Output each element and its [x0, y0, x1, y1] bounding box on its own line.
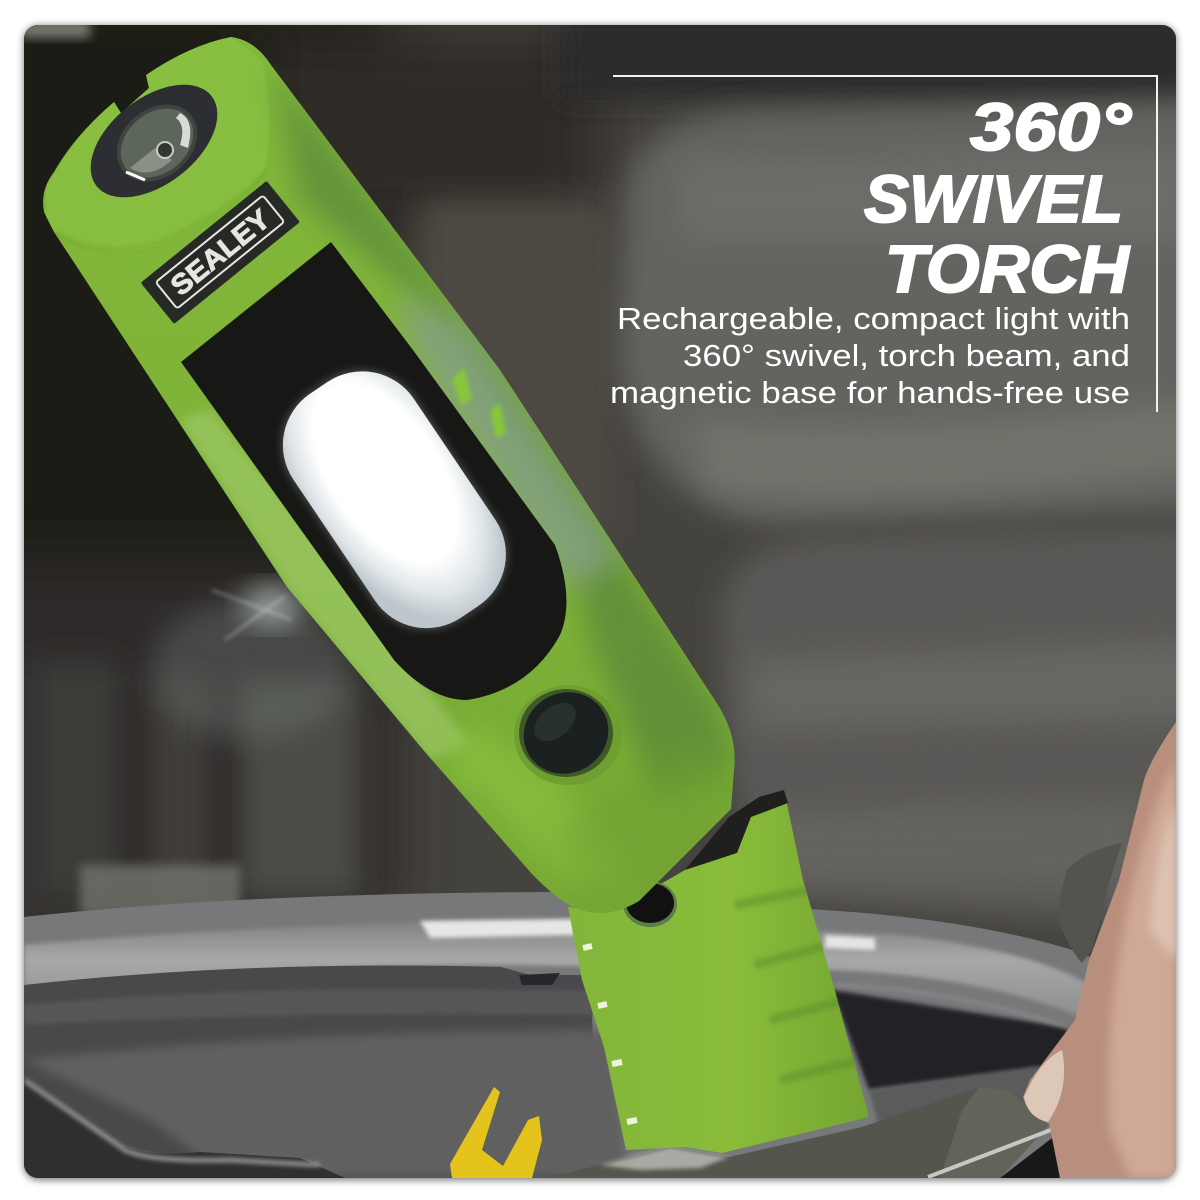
pale streaks on lower-left edge	[180, 410, 470, 760]
power button	[514, 685, 621, 785]
torch handle	[568, 790, 869, 1153]
screwdriver rod	[928, 1128, 1056, 1177]
description text: Rechargeable, compact light with	[617, 301, 1130, 336]
frame lines	[613, 76, 1157, 412]
shaded right side	[271, 65, 734, 800]
heading: TORCH	[885, 232, 1131, 307]
brand badge	[141, 181, 300, 324]
icon: torch lens	[90, 84, 218, 198]
hand	[1023, 722, 1176, 1178]
heading	[864, 90, 1132, 307]
LED light	[282, 371, 506, 628]
cap shading	[46, 37, 232, 246]
pivot hole	[623, 881, 677, 927]
description text: magnetic base for hands-free use	[610, 375, 1130, 410]
LED light glow	[278, 366, 512, 634]
black light panel	[181, 242, 566, 700]
heading: 360°	[970, 90, 1132, 165]
car engine bay	[24, 892, 1176, 1180]
tool in hand	[546, 1087, 1060, 1178]
brand badge: SEALEY	[165, 203, 276, 302]
white ridge highlights	[583, 946, 637, 1122]
upper tyre	[620, 100, 1200, 525]
description text	[610, 301, 1130, 410]
glare on upper right	[395, 290, 620, 590]
light flare on backdrop	[150, 600, 350, 740]
yellow dipstick handle	[450, 1087, 542, 1178]
black swivel wedge	[685, 790, 788, 870]
lower tyre	[720, 525, 1200, 930]
description text: 360° swivel, torch beam, and	[683, 338, 1130, 373]
torch body	[43, 37, 735, 913]
heading: SWIVEL	[864, 162, 1123, 237]
